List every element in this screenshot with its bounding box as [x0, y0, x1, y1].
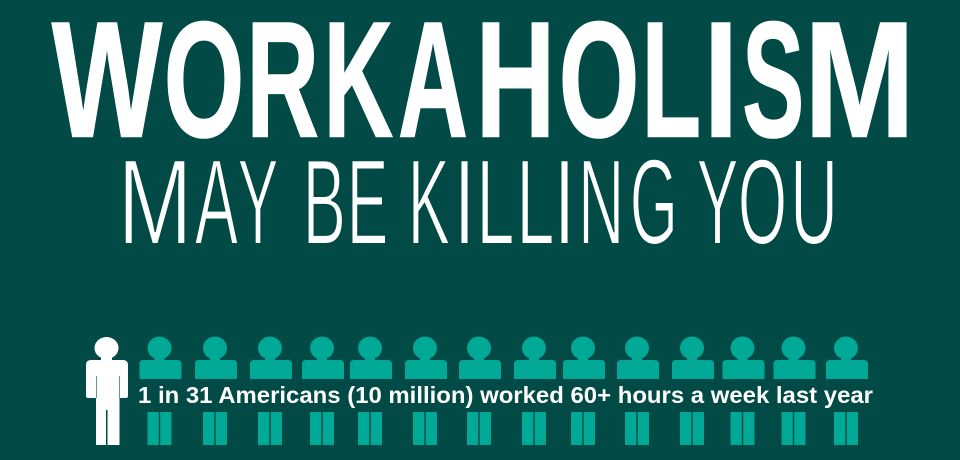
subtitle: L: [516, 134, 554, 270]
subtitle: A: [195, 134, 238, 270]
subtitle: N: [578, 134, 624, 270]
subtitle: O: [738, 134, 787, 270]
statistic caption: 1 in 31 Americans (10 million) worked 60+ hours a week last year: [138, 382, 873, 408]
subtitle: U: [790, 134, 838, 270]
subtitle: K: [408, 134, 450, 270]
subtitle: Y: [697, 134, 738, 270]
subtitle: I: [554, 134, 576, 270]
icon: white person highlighted: [86, 337, 128, 445]
subtitle: E: [347, 134, 388, 270]
subtitle: [118, 134, 838, 270]
subtitle: G: [630, 134, 678, 270]
subtitle: M: [118, 134, 192, 270]
subtitle: B: [303, 134, 346, 270]
subtitle: I: [454, 134, 476, 270]
title: [52, 0, 915, 172]
row of teal people icons: [140, 336, 868, 445]
subtitle: L: [476, 134, 514, 270]
subtitle: Y: [238, 134, 278, 270]
